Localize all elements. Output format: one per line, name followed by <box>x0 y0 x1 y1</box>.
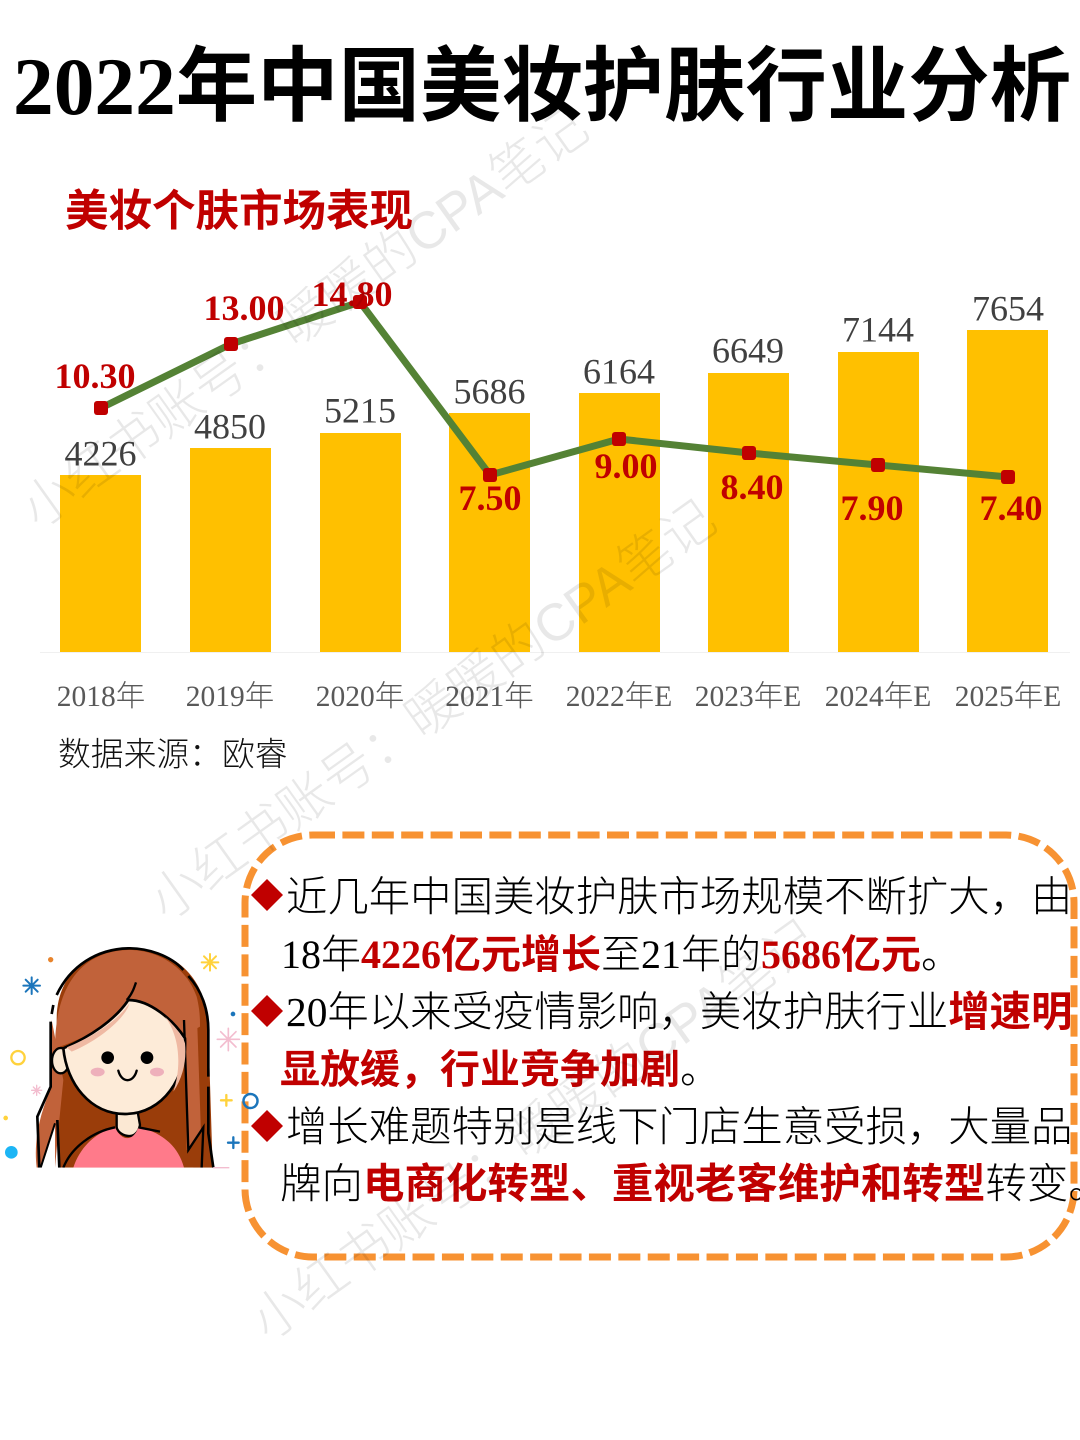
paragraph 1 <box>281 874 1072 977</box>
line markers <box>94 295 1015 484</box>
year axis labels: 2018年 <box>57 680 145 713</box>
bar value labels: 7654 <box>972 288 1044 328</box>
right lock <box>186 1028 201 1150</box>
paragraph 2 <box>280 989 1072 1092</box>
watermark: 小红书账号：暖暖的CPA笔记 <box>11 98 599 540</box>
year axis labels: 2019年 <box>186 680 274 713</box>
bar value labels <box>64 288 1044 474</box>
callout panel <box>244 835 1080 1257</box>
neck <box>117 1110 140 1136</box>
watermark: 小红书账号：暖暖的CPA笔记 <box>139 490 727 932</box>
bar value labels: 6649 <box>712 330 784 370</box>
bar value labels: 5686 <box>454 372 526 412</box>
year axis labels: 2025年E <box>955 680 1061 713</box>
year axis labels: 2020年 <box>316 680 404 713</box>
data source note: 数据来源：欧睿 <box>58 738 288 774</box>
growth line <box>101 302 1008 477</box>
year axis labels: 2021年 <box>445 680 534 713</box>
bar value labels: 4226 <box>64 434 136 474</box>
ear <box>52 1048 69 1073</box>
growth rate labels: 14.80 <box>312 274 392 314</box>
illustration: girl with long hair <box>3 948 239 1168</box>
title: 2022年中国美妆护肤行业分析 <box>13 41 1071 132</box>
growth rate labels: 10.30 <box>54 356 136 396</box>
year axis labels <box>57 680 1061 713</box>
watermark: 小红书账号：暖暖的CPA笔记 <box>241 910 829 1352</box>
watermark <box>11 98 829 1352</box>
face <box>63 1000 185 1114</box>
mouth <box>118 1071 137 1080</box>
growth rate labels: 9.00 <box>594 446 658 486</box>
paragraph 2: 显放缓，行业竞争加剧。 <box>280 1047 720 1092</box>
bullet 3 <box>251 1110 283 1142</box>
year axis labels: 2024年E <box>825 680 931 713</box>
paragraph 3 <box>280 1104 1080 1207</box>
combo chart: market size bars and growth line <box>40 274 1070 713</box>
bar value labels: 4850 <box>194 406 266 446</box>
bar value labels: 7144 <box>842 310 914 350</box>
paragraph 1: 18年4226亿元增长至21年的5686亿元。 <box>281 932 961 977</box>
hair outline <box>57 948 183 995</box>
back hair <box>57 948 213 1168</box>
bar value labels: 5215 <box>324 390 396 430</box>
growth rate labels: 8.40 <box>720 467 784 507</box>
growth rate labels <box>54 274 1042 528</box>
top hair <box>55 950 200 1048</box>
year axis labels: 2022年E <box>566 680 672 713</box>
bar value labels: 6164 <box>583 352 655 392</box>
left lock <box>36 1020 63 1168</box>
bullet 2 <box>251 995 283 1027</box>
growth rate labels: 7.90 <box>840 488 904 528</box>
bars <box>60 330 1048 652</box>
cheeks <box>91 1068 105 1076</box>
growth rate labels: 7.40 <box>980 488 1042 528</box>
year axis labels: 2023年E <box>695 680 801 713</box>
paragraph 2: 20年以来受疫情影响，美妆护肤行业增速明 <box>286 989 1072 1035</box>
bullet 1 <box>251 879 283 911</box>
growth rate labels: 7.50 <box>458 478 522 518</box>
growth rate labels: 13.00 <box>204 288 284 328</box>
paragraph 1: 近几年中国美妆护肤市场规模不断扩大，由 <box>286 874 1072 920</box>
paragraph 3: 增长难题特别是线下门店生意受损，大量品 <box>286 1104 1072 1150</box>
eyes <box>101 1051 114 1064</box>
chart heading: 美妆个肤市场表现 <box>65 188 413 236</box>
decorations <box>3 954 239 1168</box>
shirt <box>73 1127 184 1168</box>
small ring on border <box>244 1094 258 1108</box>
fringe parting <box>127 982 136 1000</box>
dashed border <box>245 835 1074 1257</box>
